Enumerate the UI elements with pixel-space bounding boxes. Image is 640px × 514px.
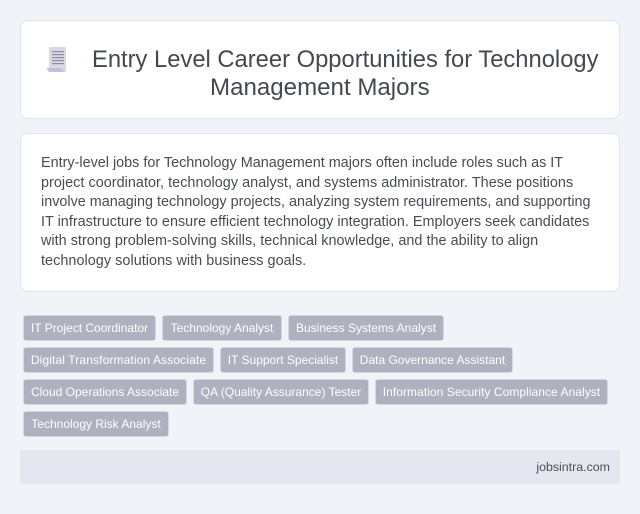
tag: IT Support Specialist [228,353,338,367]
tag [352,347,513,373]
tag [23,315,156,341]
tag: Information Security Compliance Analyst [383,385,600,399]
tag [162,315,282,341]
text block: description: technology solutions with business goals. [41,253,306,269]
panel: header [20,20,620,119]
title: Management Majors [210,74,430,101]
footer bar [20,450,620,484]
text block: description [41,155,591,269]
tag: Technology Risk Analyst [31,417,161,431]
tag: QA (Quality Assurance) Tester [201,385,361,399]
tag: Cloud Operations Associate [31,385,179,399]
text block: description: with strong problem-solving skills, technical knowledge, and the ability to align [41,233,538,249]
footer text: jobsintra.com [536,460,610,474]
tag [375,379,608,405]
tag [23,411,169,437]
tag: Business Systems Analyst [296,321,436,335]
text block: description: IT infrastructure to ensure efficient technology integration. Employers seek candidates [41,214,589,230]
tag: Technology Analyst [171,321,273,335]
tag: Digital Transformation Associate [31,353,206,367]
tag [220,347,346,373]
title [92,46,598,101]
tag [23,379,187,405]
text block: description: project coordinator, technology analyst, and systems administrator. These positions [41,175,573,191]
icon: document scroll [47,47,66,72]
tag: Data Governance Assistant [360,353,505,367]
tag list: job titles [23,315,608,437]
panel: description [20,133,620,292]
tag [23,347,214,373]
tag: IT Project Coordinator [31,321,148,335]
tag [193,379,369,405]
text block: description: involve managing technology projects, analyzing system requirements, and supporting [41,194,591,210]
tag [288,315,444,341]
title: Entry Level Career Opportunities for Technology [92,46,598,73]
text block: description: Entry-level jobs for Technology Management majors often include roles such as IT [41,155,563,171]
